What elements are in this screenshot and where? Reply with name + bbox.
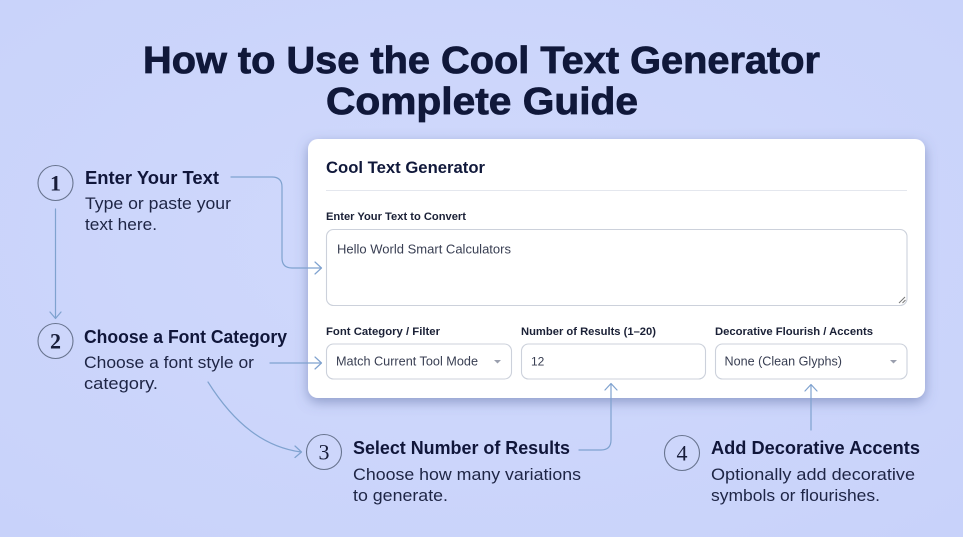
badge 4: 4: [676, 440, 688, 466]
number of results field: 12: [531, 354, 545, 368]
step 3: [306, 434, 581, 505]
step 3 text: to generate.: [353, 487, 448, 505]
badge 1: 1: [50, 170, 61, 196]
number of results field: Number of Results (1–20): [521, 326, 656, 338]
step 4 text: [711, 438, 920, 505]
badge 2: 2: [50, 328, 61, 354]
text field label: Enter Your Text to Convert: [326, 211, 466, 223]
step 4 text: Optionally add decorative: [711, 466, 915, 484]
step 2 text: Choose a Font Category: [84, 327, 287, 347]
step 2 text: category.: [84, 375, 158, 393]
panel heading: Cool Text Generator: [326, 158, 485, 177]
arrow: step 1 to text area: [231, 177, 322, 274]
step 1 text: text here.: [85, 216, 157, 234]
badge 1: [38, 166, 73, 200]
font category field: [326, 326, 512, 379]
badge 2: [38, 324, 73, 358]
step 4 text: Add Decorative Accents: [711, 438, 920, 458]
arrow: step 1 to step 2: [50, 209, 61, 318]
step 2 text: Choose a font style or: [84, 354, 255, 372]
title: [143, 40, 820, 123]
step 1: [38, 166, 232, 234]
step 2: [38, 324, 287, 393]
decorative flourish field: [715, 326, 907, 379]
step 1 text: Enter Your Text: [85, 168, 219, 188]
font category field: Font Category / Filter: [326, 326, 441, 338]
step 1 text: [85, 168, 232, 234]
step 3 text: [353, 438, 581, 505]
decorative flourish field: None (Clean Glyphs): [724, 354, 842, 368]
text area: Hello World Smart Calculators: [337, 242, 511, 256]
arrow: step 2 to font category: [270, 357, 322, 369]
decorative flourish field: Decorative Flourish / Accents: [715, 326, 873, 338]
number of results field: [521, 326, 706, 379]
badge 4: [664, 436, 700, 470]
step 4 text: symbols or flourishes.: [711, 487, 880, 505]
text area: [326, 230, 907, 306]
arrow: step 2 to step 3: [208, 382, 302, 458]
step 1 text: Type or paste your: [85, 195, 232, 213]
step 4: [664, 436, 920, 505]
badge 3: 3: [318, 440, 330, 464]
arrow: step 4 to decorative field: [805, 384, 817, 430]
badge 3: [306, 434, 342, 470]
font category field: Match Current Tool Mode: [336, 354, 478, 368]
step 2 text: [84, 327, 287, 393]
step 3 text: Select Number of Results: [353, 438, 570, 458]
title: Complete Guide: [326, 81, 638, 123]
panel: cool text generator: [308, 139, 925, 398]
arrow: step 3 to number of results: [579, 384, 617, 450]
step 3 text: Choose how many variations: [353, 466, 581, 484]
title: How to Use the Cool Text Generator: [143, 40, 820, 82]
